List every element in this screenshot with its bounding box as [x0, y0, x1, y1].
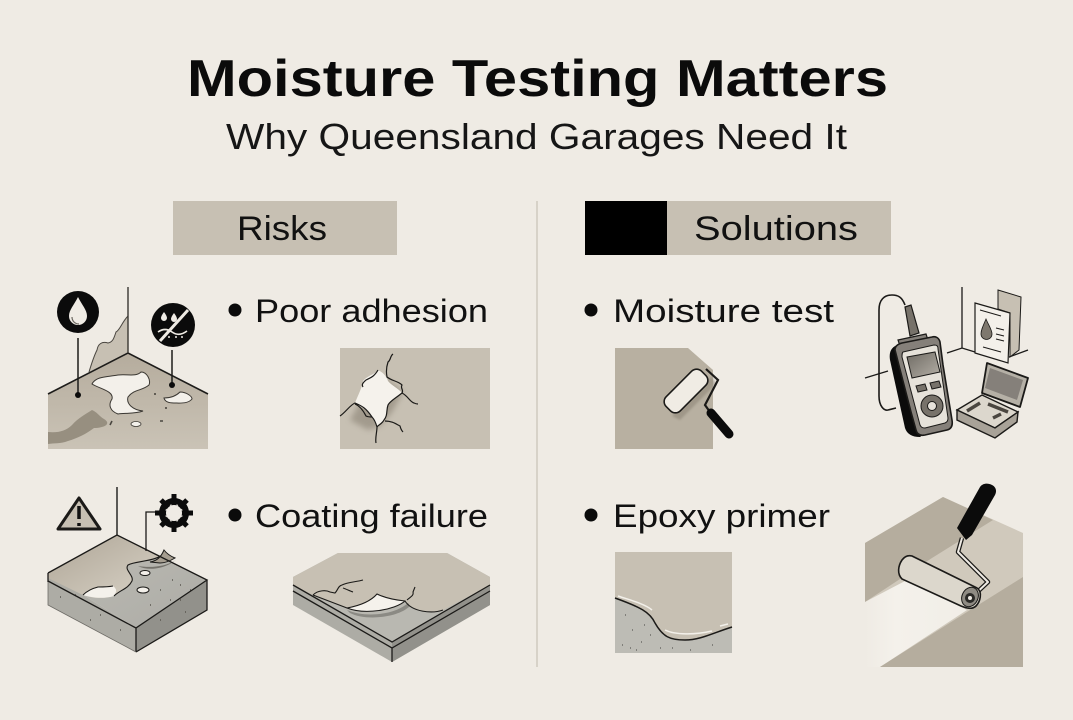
- heading: Risks: [173, 201, 397, 255]
- icon: paint roller: [899, 484, 996, 609]
- icon: document drop: [981, 319, 992, 340]
- illustration: delaminating coating section: [293, 553, 490, 662]
- bullet: Poor adhesion: Poor adhesion: [255, 293, 488, 329]
- subtitle: Why Queensland Garages Need It: [226, 116, 847, 157]
- heading: Solutions: [585, 201, 891, 255]
- bullet: Moisture test: Moisture test: [613, 293, 834, 329]
- icon: exclamation mark: [77, 506, 81, 526]
- title: Moisture Testing Matters: [187, 50, 888, 108]
- heading: Solutions: Solutions: [694, 210, 858, 248]
- illustration: peeling coating on concrete slab: [48, 487, 207, 652]
- bullet: Epoxy primer: Epoxy primer: [613, 498, 830, 534]
- illustration: roller applying primer: [865, 484, 1023, 667]
- icon: no moisture: [151, 303, 195, 388]
- icon: gear: [146, 494, 193, 551]
- icon: water drop: [57, 291, 99, 398]
- icon: open case: [982, 363, 1028, 407]
- column divider: [536, 201, 538, 667]
- bullet: Coating failure: Coating failure: [255, 498, 488, 534]
- illustration: moisture meter with kit: [865, 287, 1028, 438]
- icon: meter probe: [905, 305, 919, 336]
- heading: Risks: Risks: [237, 210, 327, 248]
- icon: warning triangle: [58, 498, 100, 529]
- illustration: small roller on surface: [615, 348, 729, 449]
- illustration: stained garage floor corner: [48, 287, 208, 449]
- illustration: primer edge over concrete: [615, 552, 732, 653]
- illustration: cracked coating patch: [340, 348, 490, 449]
